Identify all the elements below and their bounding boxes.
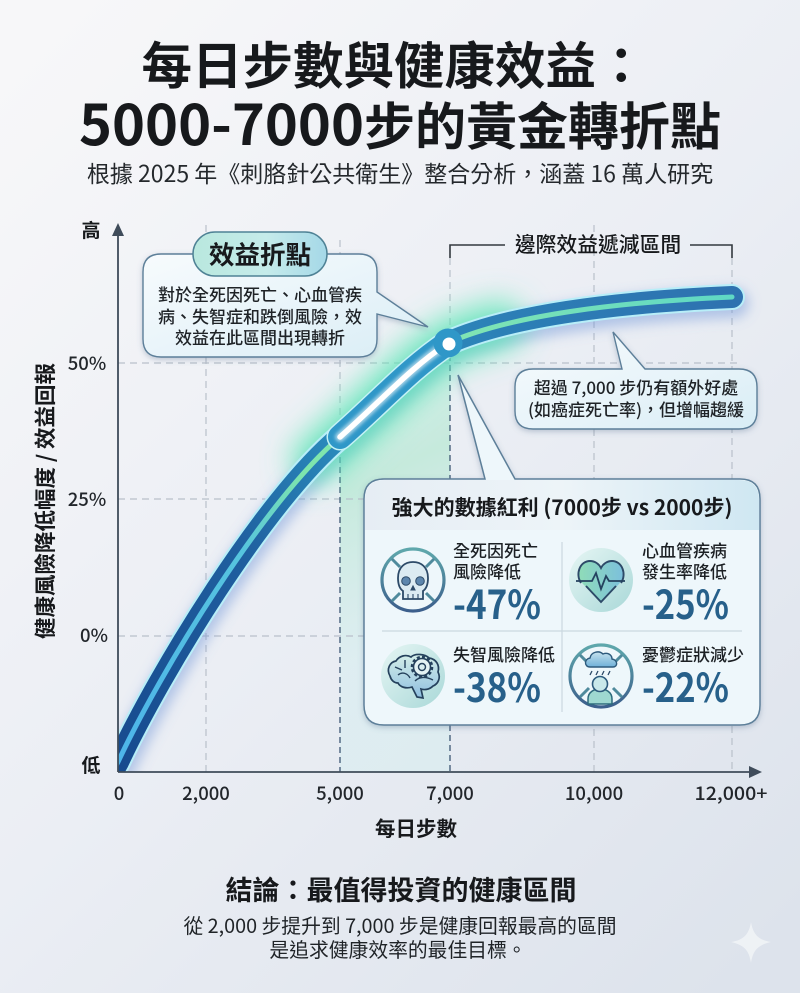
conclusion text: 是追求健康效率的最佳目標。 xyxy=(269,934,527,963)
x axis tick labels: 7,000 xyxy=(426,780,474,806)
x axis tick labels: 10,000 xyxy=(565,780,623,806)
stat: depression: 憂鬱症狀減少 xyxy=(642,641,744,666)
x axis tick labels: 0 xyxy=(114,780,124,806)
title xyxy=(79,25,721,162)
bracket: diminishing returns zone: 邊際效益遞減區間 xyxy=(515,228,681,258)
stat: cardiovascular xyxy=(569,537,729,631)
conclusion heading: 結論：最值得投資的健康區間 xyxy=(226,869,576,908)
bracket: diminishing returns zone xyxy=(450,228,732,258)
stat: dementia xyxy=(381,641,555,714)
x axis tick labels xyxy=(114,780,768,806)
icon: sparkle xyxy=(731,922,771,963)
panel heading band xyxy=(365,480,759,530)
conclusion text xyxy=(183,910,617,963)
stat: all-cause mortality xyxy=(382,537,541,631)
y axis tick labels: 0% xyxy=(80,622,108,648)
y axis tick labels: 25% xyxy=(68,486,106,512)
callout: beyond 7000: 超過 7,000 步仍有額外好處 xyxy=(534,374,738,399)
icon: heart xyxy=(569,548,633,612)
pill heading xyxy=(193,232,327,276)
callout text: 對於全死因死亡、心血管疾 xyxy=(158,281,362,306)
pill heading: 效益折點 xyxy=(209,235,311,272)
subtitle: 根據 2025 年《刺胳針公共衛生》整合分析，涵蓋 16 萬人研究 xyxy=(87,155,713,189)
stat: cardiovascular: 心血管疾病 xyxy=(642,537,727,562)
title: 每日步數與健康效益： xyxy=(142,25,646,99)
curve xyxy=(104,297,734,793)
x axis tick labels: 2,000 xyxy=(182,780,230,806)
stat: cardiovascular: -25% xyxy=(642,573,729,631)
title: 5000-7000步的黃金轉折點 xyxy=(79,81,721,162)
icon: brain xyxy=(381,644,445,708)
callout text: 病、失智症和跌倒風險，效 xyxy=(158,303,362,328)
stat: dementia: -38% xyxy=(453,656,541,714)
callout: inflection point xyxy=(143,232,428,357)
axes xyxy=(112,223,762,778)
y axis title: 健康風險降低幅度 / 效益回報 xyxy=(29,362,60,639)
x axis title: 每日步數 xyxy=(375,812,457,842)
conclusion text: 從 2,000 步提升到 7,000 步是健康回報最高的區間 xyxy=(183,910,617,939)
stat: all-cause mortality: 全死因死亡 xyxy=(453,537,538,562)
chart xyxy=(29,216,768,842)
icon: skull xyxy=(382,549,444,611)
callout text xyxy=(158,281,362,349)
stat: depression xyxy=(570,641,744,714)
stat: cardiovascular: 發生率降低 xyxy=(642,558,727,583)
icon: person under rain cloud xyxy=(570,645,632,707)
callout text: 效益在此區間出現轉折 xyxy=(175,324,345,349)
stat: depression: -22% xyxy=(642,656,729,714)
stat: dementia: 失智風險降低 xyxy=(453,641,555,666)
panel heading band: 強大的數據紅利 (7000步 vs 2000步) xyxy=(392,492,732,522)
x axis tick labels: 5,000 xyxy=(316,780,364,806)
stat: all-cause mortality: 風險降低 xyxy=(453,558,521,583)
panel: data dividends xyxy=(364,375,760,725)
y axis tick labels xyxy=(68,216,108,778)
y axis tick labels: 低 xyxy=(81,751,101,778)
x axis tick labels: 12,000+ xyxy=(694,780,768,806)
stat: all-cause mortality: -47% xyxy=(453,573,541,631)
callout: beyond 7000 xyxy=(515,332,757,429)
highlighted zone 5000-7000 xyxy=(340,342,450,772)
y axis tick labels: 高 xyxy=(81,216,101,243)
y axis tick labels: 50% xyxy=(68,350,106,376)
callout: beyond 7000: (如癌症死亡率)，但增幅趨緩 xyxy=(528,396,744,421)
